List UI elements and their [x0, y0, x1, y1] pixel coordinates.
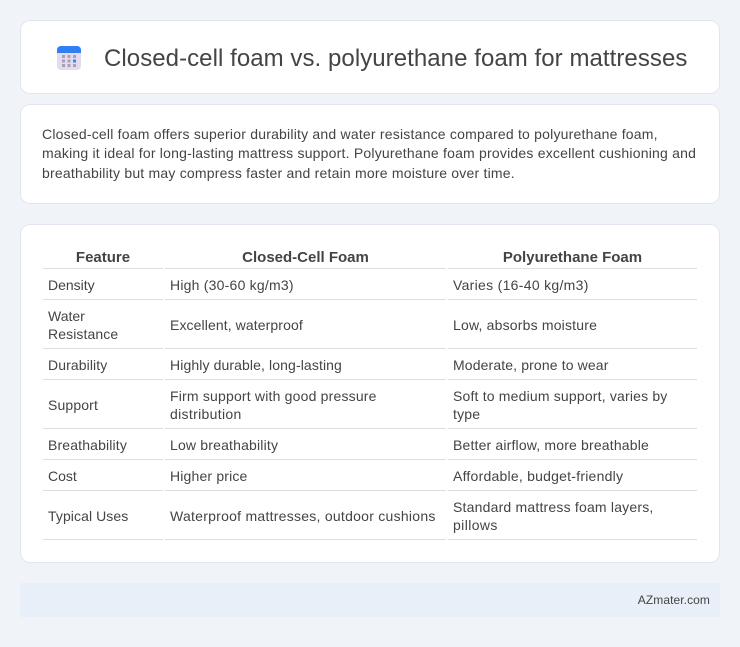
- comparison table: Resistance: [48, 326, 118, 342]
- comparison table: Closed-Cell Foam: [242, 249, 369, 266]
- comparison table: distribution: [170, 406, 242, 422]
- comparison table: Excellent, waterproof: [170, 317, 303, 333]
- comparison table: Higher price: [170, 468, 248, 484]
- summary text: making it ideal for long-lasting mattress support. Polyurethane foam provides excellent cushioning and: [42, 145, 696, 161]
- comparison table: Low breathability: [170, 437, 278, 453]
- comparison table: pillows: [453, 517, 498, 533]
- comparison table: type: [453, 406, 480, 422]
- row: density: Density: [48, 277, 95, 293]
- panel: title card: [20, 20, 720, 94]
- comparison table: Varies (16-40 kg/m3): [453, 277, 589, 293]
- table header: Feature: [76, 249, 130, 266]
- row: durability: Durability: [48, 357, 107, 373]
- row: breathability: Breathability: [48, 437, 127, 453]
- comparison table: Polyurethane Foam: [503, 249, 642, 266]
- icon: calendar: [57, 46, 81, 70]
- comparison table: Standard mattress foam layers,: [453, 499, 654, 515]
- row: support: Support: [48, 397, 98, 413]
- panel: summary card: [20, 104, 720, 204]
- row: typical uses: Typical Uses: [48, 508, 128, 524]
- row: water resistance: Water: [48, 308, 85, 324]
- footer bar: [20, 583, 720, 617]
- summary text: Closed-cell foam offers superior durability and water resistance compared to polyurethane foam,: [42, 126, 658, 142]
- summary text: [42, 126, 696, 181]
- comparison table: Better airflow, more breathable: [453, 437, 649, 453]
- comparison table: Affordable, budget-friendly: [453, 468, 623, 484]
- row: cost: Cost: [48, 468, 77, 484]
- comparison table: Highly durable, long-lasting: [170, 357, 342, 373]
- summary text: breathability but may compress faster and retain more moisture over time.: [42, 165, 515, 181]
- comparison table: Soft to medium support, varies by: [453, 388, 667, 404]
- comparison table: Moderate, prone to wear: [453, 357, 609, 373]
- comparison table: Low, absorbs moisture: [453, 317, 597, 333]
- comparison table: High (30-60 kg/m3): [170, 277, 294, 293]
- footer source text: AZmater.com: [638, 593, 710, 607]
- comparison table: Firm support with good pressure: [170, 388, 377, 404]
- comparison table: Waterproof mattresses, outdoor cushions: [170, 508, 436, 524]
- title: Closed-cell foam vs. polyurethane foam for mattresses: [104, 45, 687, 72]
- panel: comparison table card: [20, 224, 720, 563]
